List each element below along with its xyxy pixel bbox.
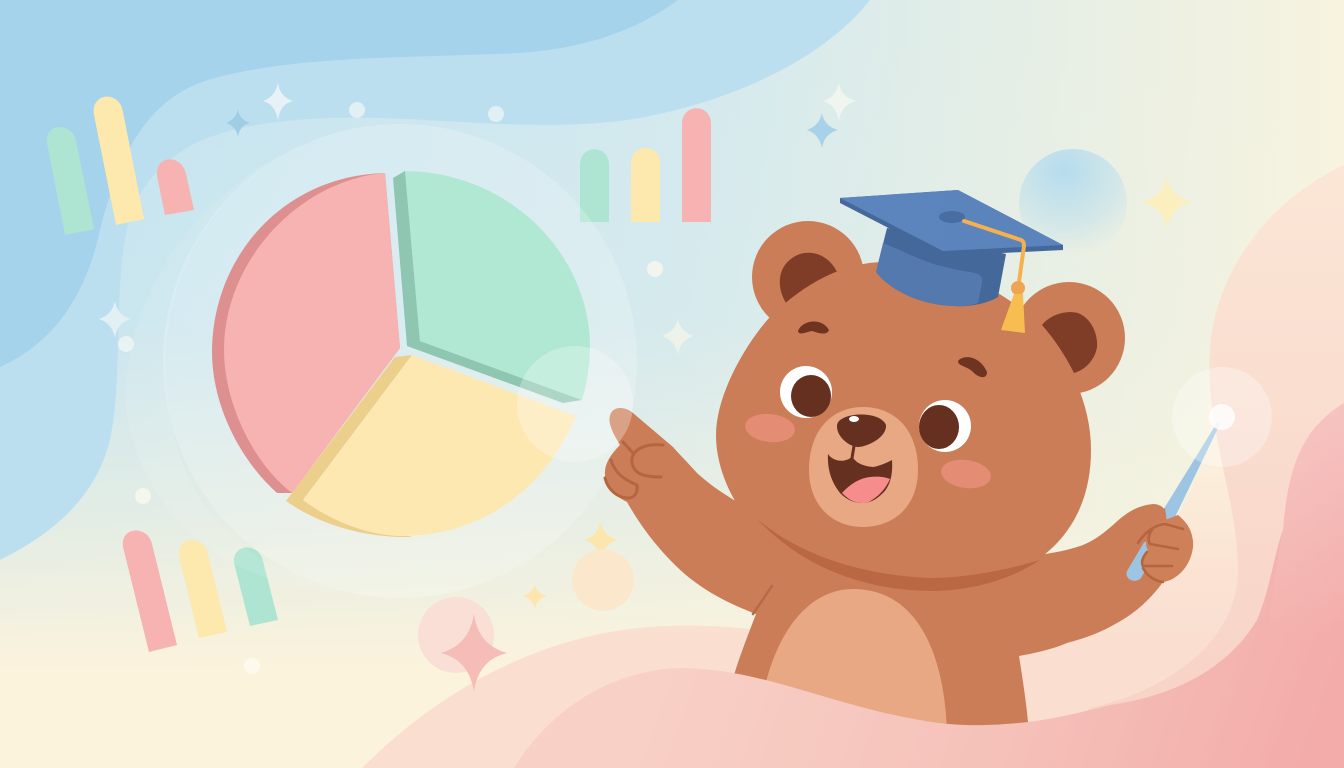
circle: pink ball <box>418 597 494 673</box>
translucent bubble near pointing finger <box>517 346 633 462</box>
tassel cord <box>964 221 1024 282</box>
cap button <box>939 211 965 223</box>
sparkle: pink <box>441 614 507 692</box>
decorative dots and sparkles <box>99 83 1192 692</box>
mouth <box>828 454 892 503</box>
wand glow <box>1172 367 1272 467</box>
nose <box>837 414 886 458</box>
bear <box>605 190 1220 768</box>
sparkle: blue <box>807 113 838 148</box>
bars: bottom left <box>123 530 278 652</box>
sparkle: blue <box>226 109 250 137</box>
circle: peach ball <box>572 549 634 611</box>
graduation cap <box>840 190 1063 333</box>
sparkle: yellow <box>523 584 547 609</box>
sparkle: yellow <box>1142 177 1192 229</box>
torso <box>725 540 1035 768</box>
eyebrow right <box>958 357 987 377</box>
tassel <box>1001 281 1025 333</box>
eyebrow left <box>798 321 829 334</box>
sparkle: white <box>662 319 694 355</box>
pie chart <box>212 171 590 537</box>
left arm pointing <box>605 408 800 614</box>
background blue waves <box>0 0 870 560</box>
bars: top centre <box>580 108 711 222</box>
sparkle: white <box>263 83 293 120</box>
cap board <box>840 190 1063 256</box>
background pink back wave <box>362 380 1344 768</box>
cheek left <box>744 411 796 445</box>
bars: top left <box>47 97 194 235</box>
chin shadow <box>757 519 1040 591</box>
sparkle: yellow <box>584 521 618 559</box>
right arm <box>1000 504 1193 660</box>
wand <box>1127 421 1220 581</box>
slice: yellow <box>286 355 576 537</box>
cheek right <box>939 457 993 491</box>
right hand with wand <box>1127 421 1220 582</box>
belly <box>762 589 947 735</box>
sparkle: white <box>99 301 131 338</box>
foreground pink cloud <box>514 403 1344 768</box>
ear left <box>752 221 864 333</box>
ear right <box>1013 282 1125 394</box>
eye left <box>780 366 832 418</box>
circle: blue ball <box>1019 149 1127 257</box>
eye right <box>919 400 971 452</box>
sparkle: white <box>823 83 856 121</box>
slice: pink <box>212 173 400 493</box>
fingers <box>1143 515 1193 582</box>
cap base <box>876 228 1006 306</box>
pie chart halo <box>125 124 637 598</box>
background peach wave <box>1020 165 1344 768</box>
head <box>716 262 1091 588</box>
arm crease <box>753 586 772 614</box>
muzzle <box>809 407 918 527</box>
palm <box>1138 508 1167 545</box>
slice: green <box>393 171 590 403</box>
